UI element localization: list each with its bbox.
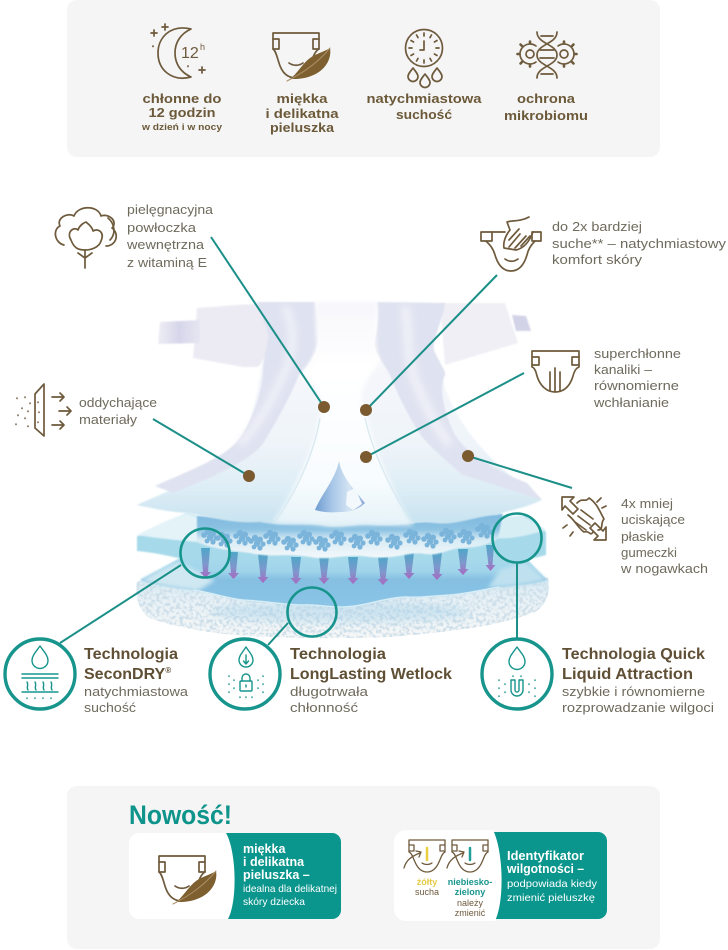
heading: new: Nowość! bbox=[129, 800, 232, 830]
heading: LongLasting Wetlock bbox=[290, 666, 452, 683]
text: do 2x bardziej bbox=[552, 219, 642, 234]
text: uciskające bbox=[621, 512, 685, 527]
heading: SeconDRY bbox=[84, 666, 165, 683]
pale right end of the blue layer bbox=[488, 562, 547, 588]
icon: diaper with feather bbox=[273, 33, 330, 81]
technology: SeconDRY bbox=[5, 639, 189, 715]
heading bbox=[84, 646, 178, 683]
absorbent white layer bbox=[197, 514, 503, 558]
blue tint in the core bbox=[210, 601, 470, 623]
right cuff highlight bbox=[405, 306, 450, 445]
text: gumeczki bbox=[621, 545, 677, 560]
callout: drier skin bbox=[481, 217, 727, 271]
description bbox=[84, 684, 189, 715]
text: 4x mniej bbox=[621, 496, 673, 511]
heading: Technologia bbox=[290, 646, 386, 663]
drop bbox=[315, 461, 365, 512]
pale left end of the blue layer bbox=[140, 562, 215, 591]
text: powłoczka bbox=[127, 220, 197, 235]
text: absorbent 12 hours: chłonne do bbox=[142, 91, 222, 106]
text: wewnętrzna bbox=[126, 237, 205, 252]
icon: cotton bbox=[55, 208, 116, 268]
icon: moon 12h bbox=[151, 24, 205, 78]
text: z witaminą E bbox=[127, 255, 207, 270]
text: pielęgnacyjna bbox=[127, 202, 214, 217]
heading bbox=[562, 646, 705, 683]
icon: flat elastics bbox=[562, 497, 606, 540]
icon: diaper with feather bbox=[159, 856, 216, 904]
text: komfort skóry bbox=[552, 252, 643, 267]
description bbox=[562, 684, 714, 715]
heading: ® bbox=[165, 666, 171, 675]
badge bbox=[210, 639, 280, 709]
panel: top benefits bbox=[67, 0, 660, 157]
text: suche** – natychmiastowy bbox=[552, 236, 727, 251]
heading: Technologia Quick bbox=[562, 646, 705, 663]
description bbox=[290, 684, 369, 715]
text: zmienić pieluszkę bbox=[507, 892, 595, 904]
badge bbox=[5, 639, 75, 709]
left ear bbox=[193, 303, 280, 367]
indicator labels: niebiesko- bbox=[448, 877, 492, 887]
text: wchłanianie bbox=[593, 395, 669, 410]
text: instant dryness: natychmiastowa bbox=[366, 91, 482, 106]
text: absorbent 12 hours: w dzień i w nocy bbox=[141, 122, 222, 132]
text bbox=[79, 395, 157, 427]
callout: channels bbox=[532, 346, 681, 410]
text: płaskie bbox=[621, 529, 664, 544]
channel edges bbox=[275, 418, 413, 524]
text: soft and gentle: i delikatna bbox=[266, 106, 339, 121]
text: kanaliki – bbox=[594, 362, 653, 377]
left cuff highlight bbox=[240, 306, 293, 445]
panel: new features bbox=[67, 786, 660, 949]
right tab bbox=[512, 315, 531, 331]
text: podpowiada kiedy bbox=[507, 878, 598, 890]
text bbox=[243, 842, 337, 908]
text: soft and gentle: miękka bbox=[276, 91, 328, 106]
card: soft diaper bbox=[129, 833, 341, 919]
text bbox=[620, 496, 708, 576]
text: absorbent 12 hours: 12 godzin bbox=[148, 105, 216, 120]
pale upper face on the right bbox=[490, 515, 546, 538]
blue distribution layer bbox=[140, 552, 547, 607]
callout lines bbox=[60, 237, 572, 645]
heading bbox=[290, 646, 452, 683]
text: i delikatna bbox=[243, 855, 305, 869]
indicator labels bbox=[415, 877, 492, 918]
callout: breathable materials bbox=[16, 384, 157, 436]
pale upper face on the left bbox=[137, 513, 210, 542]
indicator labels: sucha bbox=[415, 887, 439, 897]
grainy core layer bbox=[136, 567, 549, 638]
text: microbiome protection bbox=[504, 91, 588, 123]
technology: LongLasting Wetlock bbox=[210, 639, 452, 715]
right leg cuff bbox=[374, 302, 542, 500]
description: natychmiastowa bbox=[84, 684, 189, 699]
text: soft and gentle bbox=[266, 91, 339, 135]
text: miękka bbox=[243, 842, 286, 856]
text: oddychające bbox=[79, 395, 157, 410]
text: skóry dziecka bbox=[243, 896, 305, 908]
text: instant dryness bbox=[366, 91, 482, 122]
icon: yellow indicator diaper bbox=[404, 840, 445, 872]
indicator labels: zmienić bbox=[455, 908, 486, 918]
description: długotrwała bbox=[290, 684, 369, 699]
icon: clock and drops bbox=[406, 30, 442, 88]
text: równomierne bbox=[594, 378, 679, 393]
text: w nogawkach bbox=[620, 561, 708, 576]
icon: hand on diaper bbox=[481, 217, 541, 271]
text: wilgotności – bbox=[506, 862, 584, 876]
text: superchłonne bbox=[594, 346, 681, 361]
callout dots bbox=[243, 401, 474, 482]
callout: inner coating bbox=[55, 202, 214, 270]
description: szybkie i równomierne bbox=[562, 684, 705, 699]
text bbox=[593, 346, 681, 410]
left tab bbox=[158, 320, 200, 344]
indicator labels: zielony bbox=[455, 887, 485, 897]
text: instant dryness: suchość bbox=[396, 107, 452, 122]
text: microbiome protection: mikrobiomu bbox=[504, 108, 588, 123]
icon: teal indicator diaper bbox=[447, 840, 488, 872]
description: suchość bbox=[84, 700, 137, 715]
left leg cuff bbox=[155, 302, 318, 493]
technology: Quick Liquid Attraction bbox=[482, 639, 714, 715]
side band of the blue layer bbox=[137, 513, 546, 561]
purple arrows bbox=[200, 545, 496, 585]
blue blotches bbox=[201, 523, 493, 552]
right ear bbox=[440, 303, 518, 365]
top sheet bbox=[137, 360, 542, 526]
text bbox=[126, 202, 214, 270]
text: Identyfikator bbox=[507, 849, 584, 863]
text bbox=[506, 849, 598, 904]
icon: moon 12h: 12 bbox=[181, 45, 199, 62]
magnifier circles bbox=[180, 514, 542, 636]
icon: diaper with channels bbox=[532, 351, 579, 392]
text: soft and gentle: pieluszka bbox=[270, 120, 335, 135]
icon: DNA and gears bbox=[518, 32, 576, 78]
indicator labels: należy bbox=[457, 898, 484, 908]
indicator labels: żółty bbox=[417, 877, 437, 887]
icon: breathable layer bbox=[16, 384, 71, 436]
callout: leg elastics bbox=[562, 496, 708, 576]
heading: Liquid Attraction bbox=[562, 666, 693, 683]
diaper illustration bbox=[136, 302, 549, 638]
light seams of the blue layer bbox=[193, 587, 500, 607]
text: materiały bbox=[79, 412, 138, 427]
text: idealna dla delikatnej bbox=[243, 883, 337, 895]
heading: Technologia bbox=[84, 646, 178, 663]
text bbox=[552, 219, 727, 267]
badge bbox=[482, 639, 552, 709]
card: wetness indicator bbox=[394, 830, 607, 921]
icon: moon 12h: h bbox=[200, 42, 205, 52]
description: rozprowadzanie wilgoci bbox=[562, 700, 714, 715]
text: pieluszka – bbox=[243, 868, 310, 882]
text: microbiome protection: ochrona bbox=[517, 91, 576, 106]
text: absorbent 12 hours bbox=[141, 91, 222, 132]
central white strip bbox=[273, 302, 413, 526]
description: chłonność bbox=[290, 700, 359, 715]
